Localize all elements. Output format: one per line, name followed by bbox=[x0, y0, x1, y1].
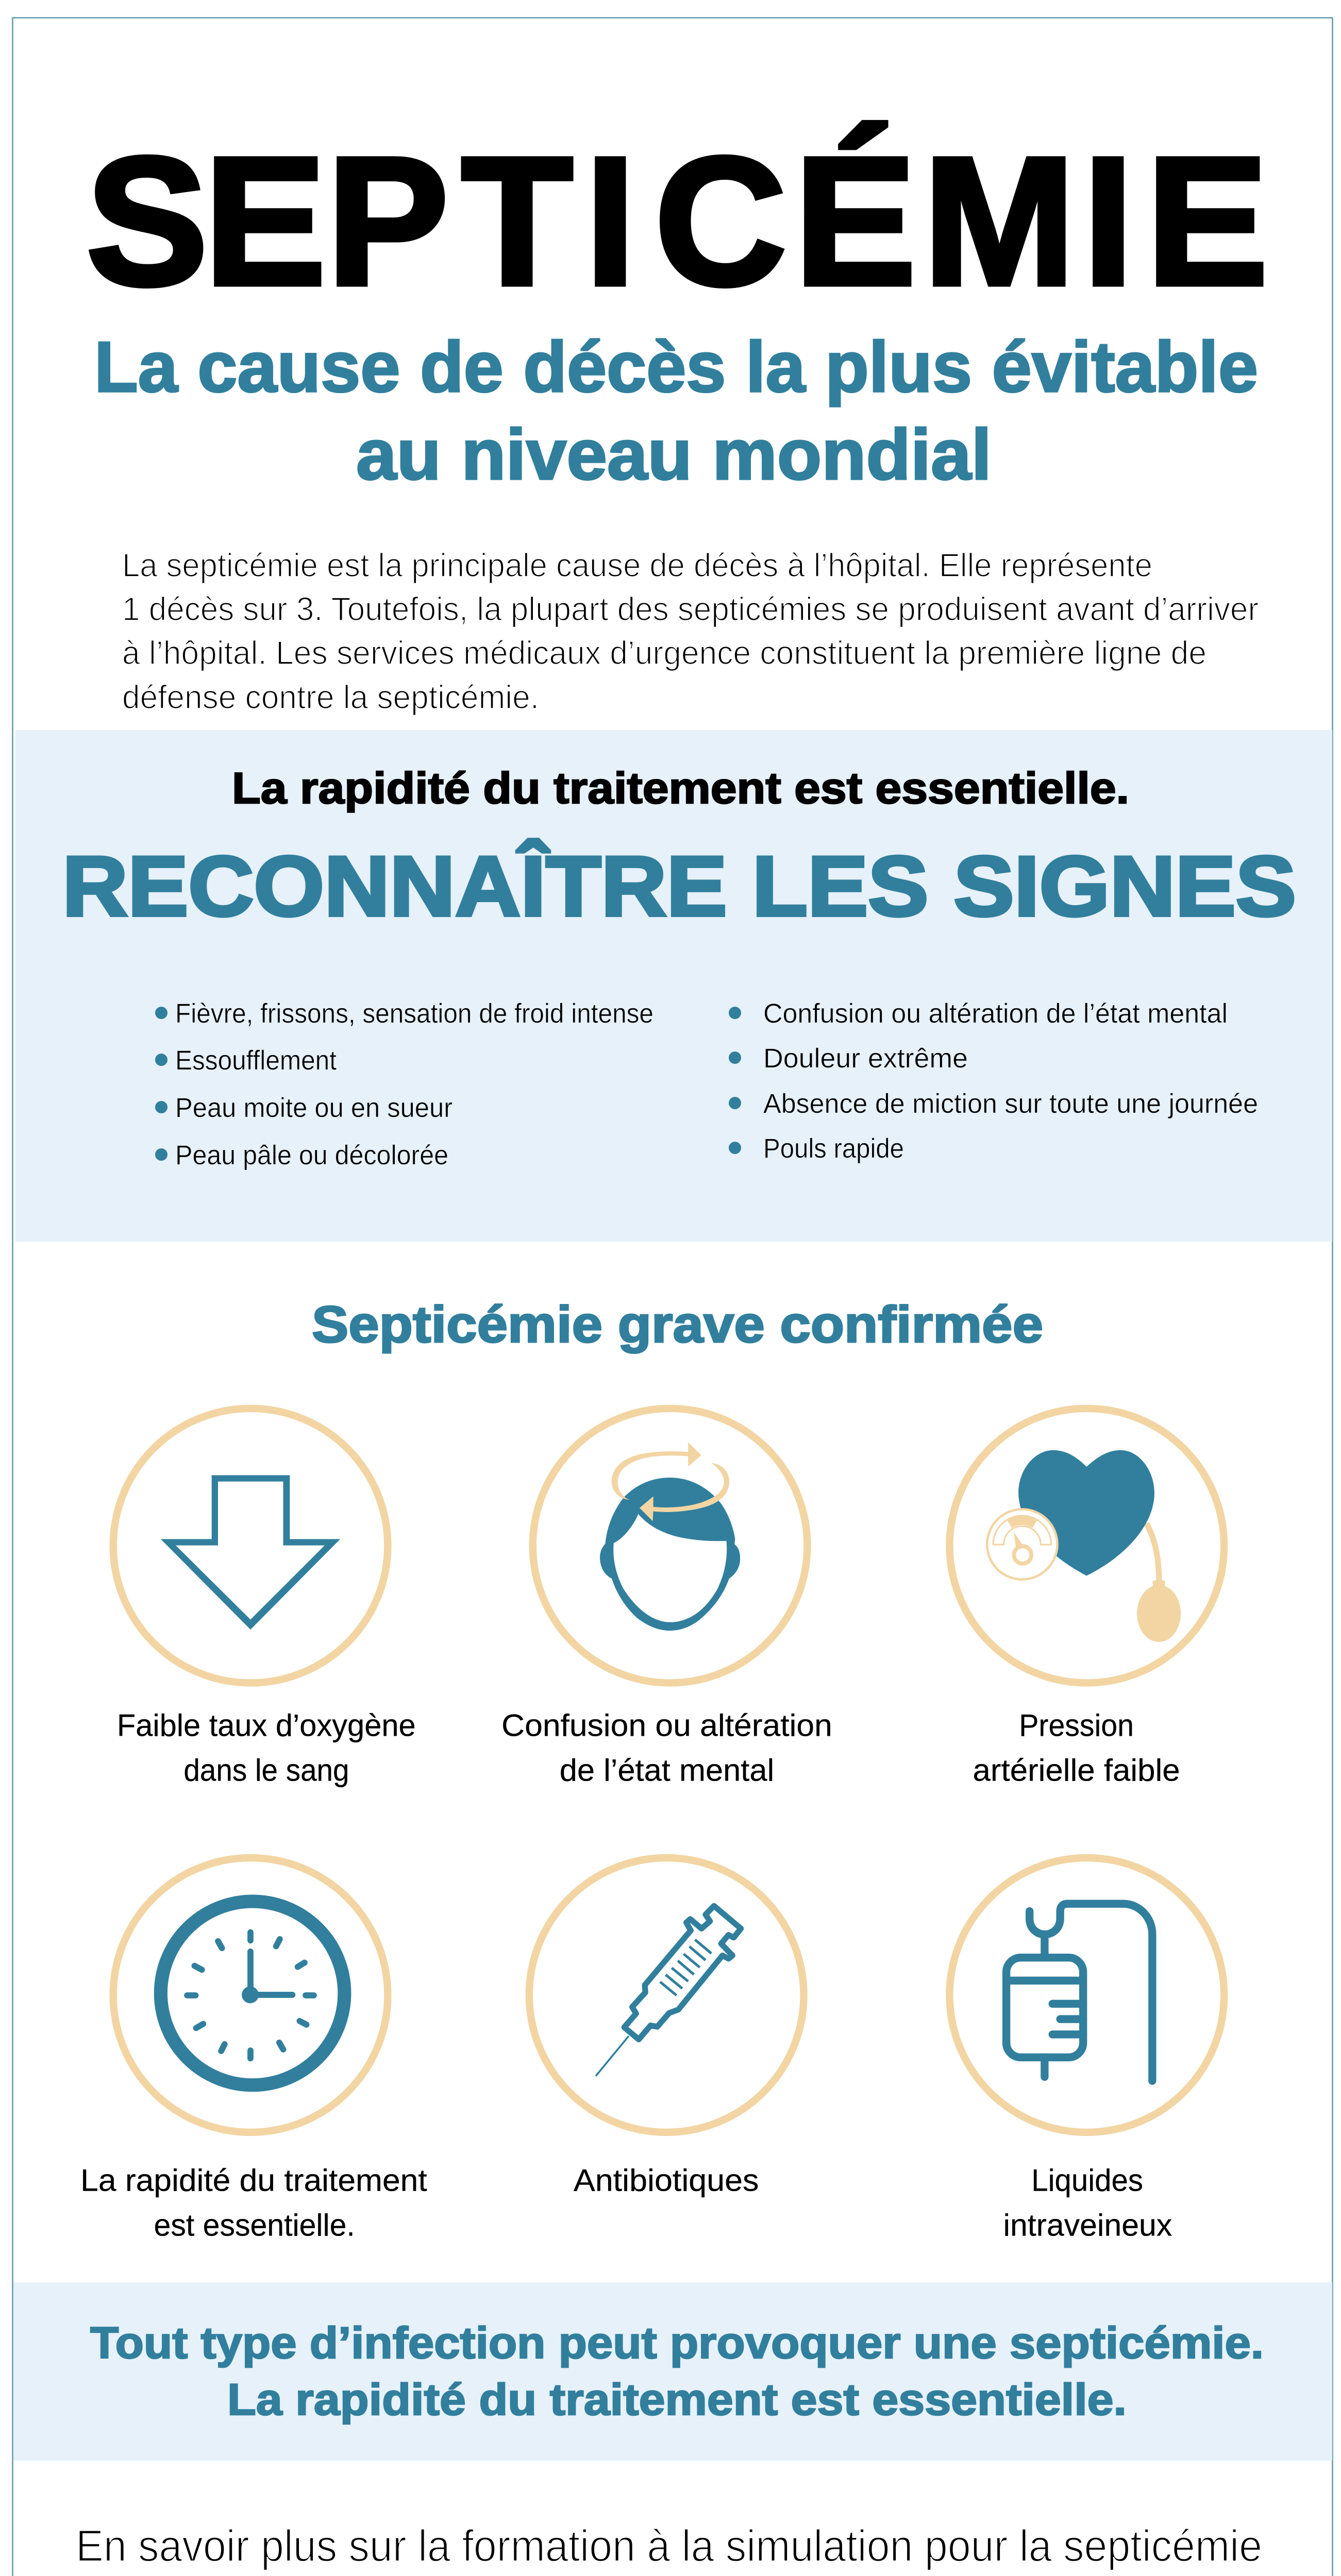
label: speed of treatment bbox=[80, 2162, 427, 2243]
label: intravenous fluids bbox=[1003, 2162, 1172, 2243]
list: signs left column: Fièvre, frissons, sensation de froid intense bbox=[175, 998, 653, 1029]
icon: heart with blood pressure cuff bbox=[987, 1450, 1181, 1642]
panel: signs background bbox=[15, 730, 1332, 1242]
list: signs left column bbox=[155, 998, 653, 1171]
icon: clock bbox=[161, 1902, 344, 2085]
subtitle: La cause de décès la plus évitable bbox=[94, 327, 1258, 407]
call to action text: En savoir plus sur la formation à la simulation pour la septicémie bbox=[76, 2521, 1262, 2571]
bottom message: La rapidité du traitement est essentielle. bbox=[227, 2375, 1127, 2425]
label: speed of treatment: La rapidité du traitement bbox=[80, 2162, 427, 2197]
list: signs right column: Douleur extrême bbox=[763, 1043, 968, 1074]
list: signs right column: Pouls rapide bbox=[763, 1133, 904, 1164]
label: low blood oxygen bbox=[117, 1707, 416, 1787]
bottom message bbox=[90, 2318, 1264, 2425]
label: low blood oxygen: dans le sang bbox=[183, 1752, 349, 1787]
intro text block: à l’hôpital. Les services médicaux d’urgence constituent la première ligne de bbox=[122, 634, 1206, 671]
icon: head with spinning arrows bbox=[600, 1442, 740, 1631]
panel: speed of treatment bbox=[80, 1858, 427, 2243]
intro text block: La septicémie est la principale cause de décès à l’hôpital. Elle représente bbox=[122, 547, 1152, 584]
label: intravenous fluids: Liquides bbox=[1031, 2162, 1143, 2197]
label: low blood pressure: artérielle faible bbox=[973, 1752, 1180, 1787]
label: antibiotics: Antibiotiques bbox=[574, 2162, 759, 2197]
list: signs right column bbox=[729, 998, 1258, 1164]
panel: bottom message background bbox=[13, 2282, 1332, 2461]
intro text block: défense contre la septicémie. bbox=[122, 679, 539, 716]
label: confusion: de l’état mental bbox=[560, 1752, 774, 1787]
heading: confirmed severe sepsis: Septicémie grave confirmée bbox=[312, 1296, 1043, 1353]
heading: recognise the signs: RECONNAÎTRE LES SIGNES bbox=[62, 839, 1296, 934]
label: confusion bbox=[501, 1707, 832, 1787]
icon: syringe bbox=[596, 1906, 741, 2076]
subtitle bbox=[94, 327, 1258, 495]
panel: low blood pressure bbox=[949, 1409, 1224, 1787]
list: signs right column: Absence de miction sur toute une journée bbox=[763, 1089, 1258, 1119]
panel: confusion bbox=[501, 1409, 832, 1787]
label: intravenous fluids: intraveineux bbox=[1003, 2208, 1172, 2243]
icon: down arrow bbox=[161, 1475, 340, 1630]
label: low blood pressure: Pression bbox=[1019, 1707, 1134, 1742]
list: signs right column: Confusion ou altération de l’état mental bbox=[763, 998, 1228, 1029]
panel: low blood oxygen bbox=[113, 1409, 416, 1787]
panel: antibiotics bbox=[529, 1858, 804, 2197]
heading: speed of treatment: La rapidité du traitement est essentielle. bbox=[232, 764, 1129, 813]
list: signs left column: Peau moite ou en sueur bbox=[175, 1093, 452, 1123]
bottom message: Tout type d’infection peut provoquer une septicémie. bbox=[90, 2318, 1264, 2368]
panel: intravenous fluids bbox=[949, 1858, 1224, 2243]
list: signs left column: Peau pâle ou décolorée bbox=[175, 1140, 448, 1171]
title: SEPTICÉMIE bbox=[86, 120, 1268, 324]
label: speed of treatment: est essentielle. bbox=[154, 2208, 355, 2243]
icon: IV bag bbox=[1007, 1904, 1152, 2081]
subtitle: au niveau mondial bbox=[356, 415, 992, 495]
intro text block: 1 décès sur 3. Toutefois, la plupart des septicémies se produisent avant d’arriver bbox=[122, 590, 1259, 628]
label: low blood pressure bbox=[973, 1707, 1180, 1787]
label: confusion: Confusion ou altération bbox=[501, 1707, 832, 1742]
list: signs left column: Essoufflement bbox=[175, 1045, 337, 1076]
intro text block bbox=[122, 547, 1259, 716]
label: low blood oxygen: Faible taux d’oxygène bbox=[117, 1707, 416, 1742]
